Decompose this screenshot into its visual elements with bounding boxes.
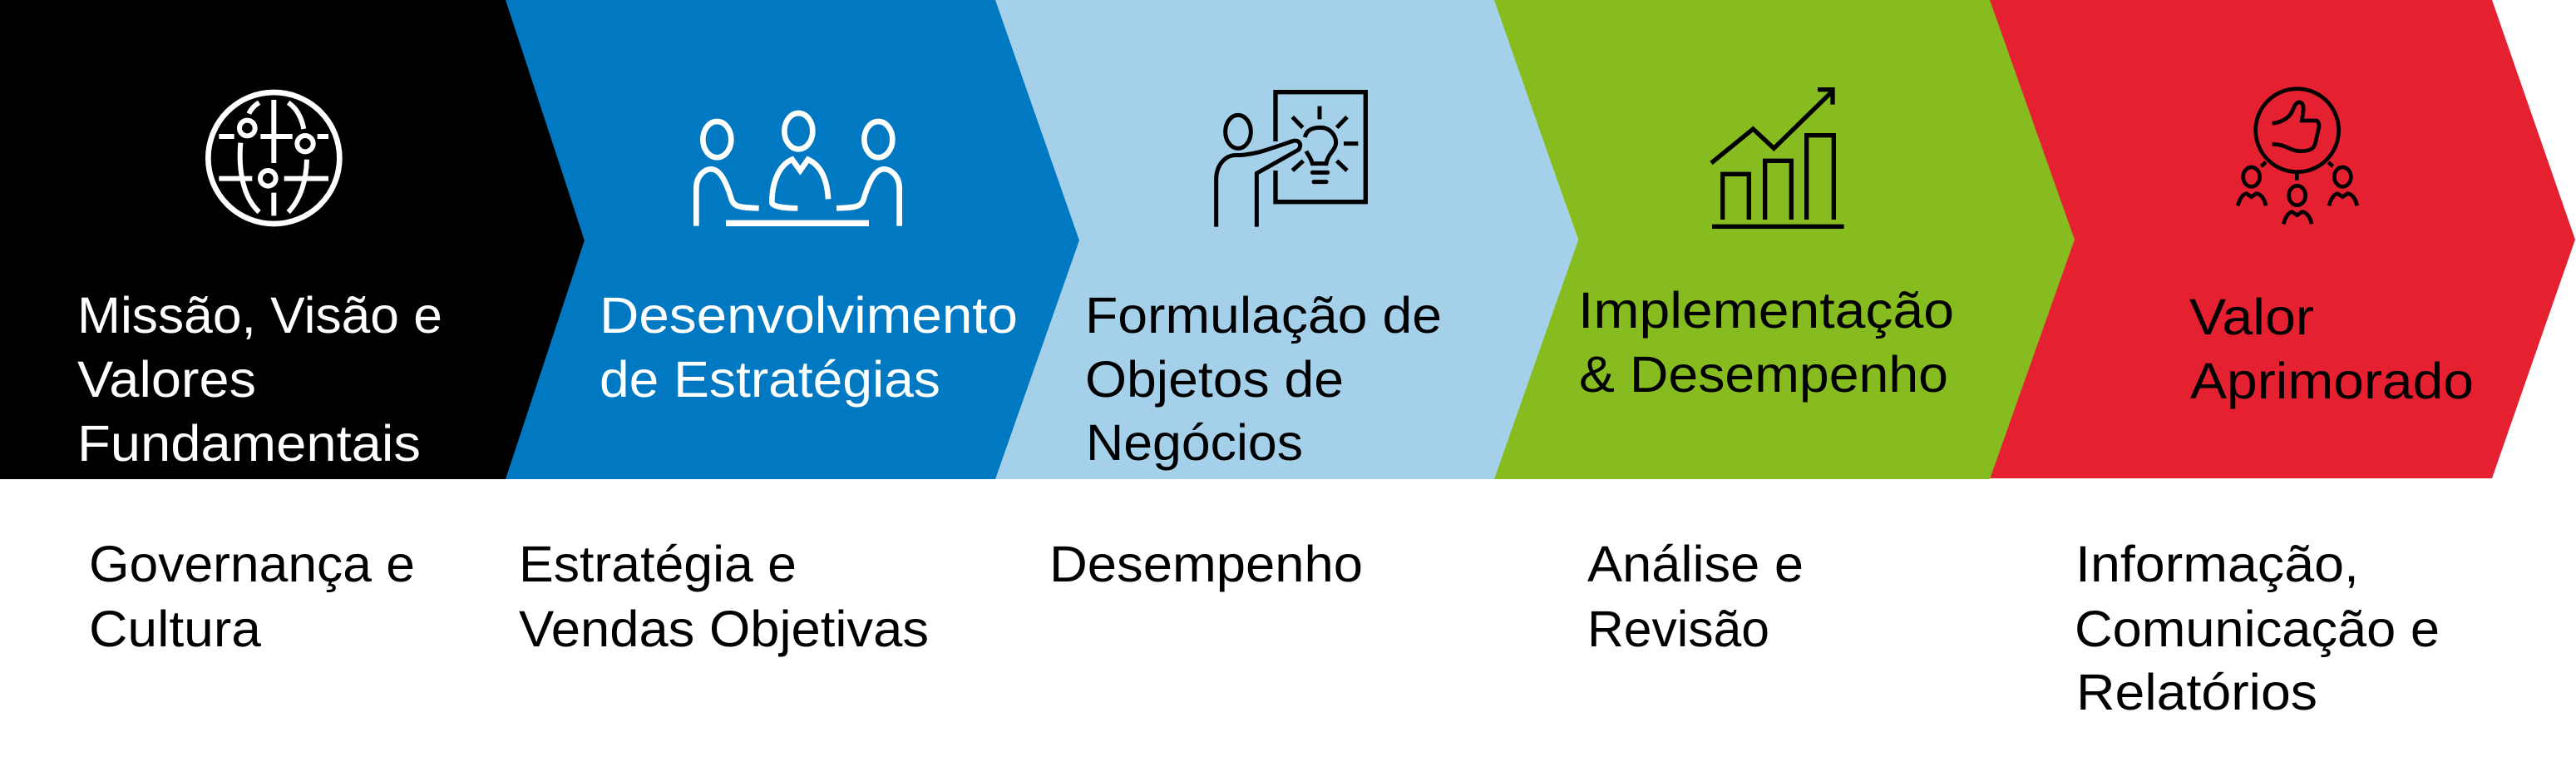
icon: bar chart with rising arrow: [1711, 90, 1844, 226]
label: Governança e Cultura: Cultura: [89, 601, 261, 657]
chevron: red: [1989, 0, 2575, 478]
label: Governança e Cultura: Governança e: [89, 536, 415, 592]
heading: Formulação de Objetos de Negócios: Formulação de: [1085, 287, 1442, 344]
label: Informação, Comunicação e Relatórios: Informação,: [2075, 536, 2359, 592]
heading: Valor Aprimorado: [2189, 289, 2474, 409]
label: Estratégia e Vendas Objetivas: Vendas Objetivas: [519, 601, 929, 657]
heading: Desenvolvimento de Estratégias: [600, 287, 1018, 408]
heading: Desenvolvimento de Estratégias: de Estratégias: [600, 351, 940, 408]
heading: Valor Aprimorado: Valor: [2189, 289, 2314, 345]
label: Estratégia e Vendas Objetivas: [519, 536, 929, 657]
label: Informação, Comunicação e Relatórios: Relatórios: [2076, 664, 2317, 720]
icon: presenter pointing at light bulb: [1216, 92, 1365, 227]
label: Governança e Cultura: [89, 536, 415, 657]
heading: Formulação de Objetos de Negócios: [1085, 287, 1442, 471]
label: Informação, Comunicação e Relatórios: [2075, 536, 2440, 720]
heading: Formulação de Objetos de Negócios: Negócios: [1086, 414, 1303, 471]
chevron: blue: [505, 0, 1079, 479]
panel: Valor Aprimorado: [1989, 0, 2575, 478]
panel: Formulação de Objetos de Negócios: [994, 0, 1578, 479]
chevron: black: [0, 0, 585, 479]
heading: Missão, Visão e Valores Fundamentais: Valores: [77, 351, 256, 408]
panel: Implementação & Desempenho: [1493, 0, 2075, 479]
icon: globe with nodes: [208, 92, 339, 224]
heading: Missão, Visão e Valores Fundamentais: [77, 287, 442, 472]
icon: thumbs up with three people: [2238, 89, 2357, 224]
heading: Implementação & Desempenho: & Desempenho: [1579, 346, 1948, 403]
label: Informação, Comunicação e Relatórios: Comunicação e: [2075, 601, 2440, 657]
heading: Missão, Visão e Valores Fundamentais: Fundamentais: [77, 415, 421, 472]
chevron: green: [1493, 0, 2075, 479]
label: Desempenho: Desempenho: [1049, 536, 1363, 592]
chevron: light blue: [994, 0, 1578, 479]
heading: Formulação de Objetos de Negócios: Objetos de: [1085, 351, 1344, 408]
panel: Desenvolvimento de Estratégias: [505, 0, 1079, 479]
heading: Implementação & Desempenho: Implementação: [1578, 282, 1954, 339]
label: Análise e Revisão: Revisão: [1587, 601, 1769, 657]
label: Estratégia e Vendas Objetivas: Estratégia e: [519, 536, 797, 592]
heading: Missão, Visão e Valores Fundamentais: Missão, Visão e: [77, 287, 442, 344]
heading: Implementação & Desempenho: [1578, 282, 1954, 403]
panel: Missão, Visão e Valores Fundamentais: [0, 0, 585, 479]
heading: Desenvolvimento de Estratégias: Desenvolvimento: [600, 287, 1018, 344]
heading: Valor Aprimorado: Aprimorado: [2190, 353, 2474, 409]
icon: three people at a table: [696, 113, 900, 226]
label: Análise e Revisão: [1587, 536, 1804, 657]
label: Análise e Revisão: Análise e: [1587, 536, 1804, 592]
